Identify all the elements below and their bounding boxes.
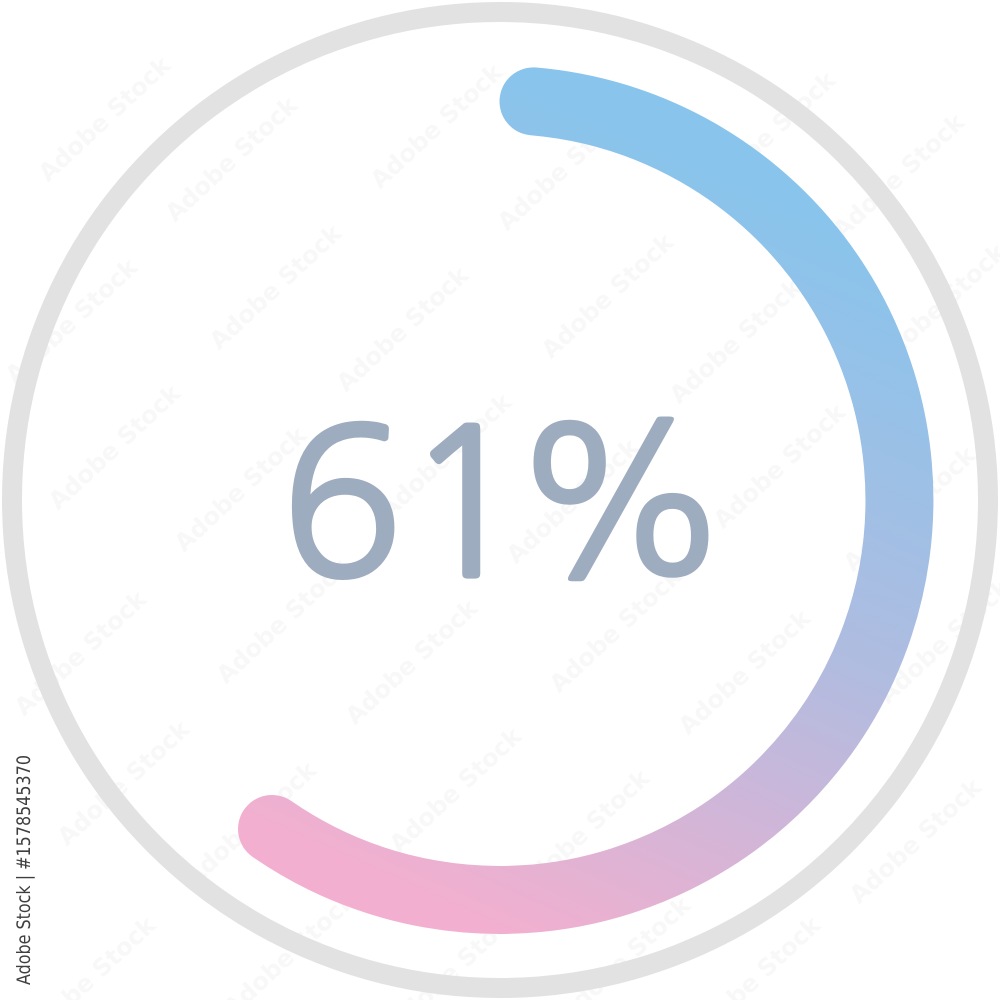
watermark pattern: Adobe Stock [844, 772, 988, 909]
watermark pattern: Adobe Stock [827, 107, 971, 244]
watermark pattern: Adobe Stock [160, 90, 304, 227]
watermark pattern: Adobe Stock [492, 99, 636, 236]
watermark pattern: Adobe Stock [708, 397, 852, 534]
watermark pattern: Adobe Stock [673, 603, 817, 740]
watermark pattern: Adobe Stock [365, 57, 509, 194]
watermark pattern: Adobe Stock [52, 714, 196, 851]
watermark pattern: Adobe Stock [374, 387, 518, 524]
percentage label: % [510, 402, 732, 606]
watermark pattern: Adobe Stock [544, 561, 688, 698]
percentage label: 6 [280, 402, 404, 606]
watermark pattern: Adobe Stock [698, 65, 842, 202]
watermark pattern: Adobe Stock [716, 730, 860, 867]
percentage label [280, 402, 732, 606]
watermark pattern: Adobe Stock [512, 763, 656, 900]
watermark pattern: Adobe Stock [331, 260, 475, 397]
watermark pattern: Adobe Stock [169, 420, 313, 557]
watermark pattern: Adobe Stock [43, 378, 187, 515]
watermark pattern: Adobe Stock [33, 50, 177, 187]
watermark pattern: Adobe Stock [9, 584, 153, 721]
watermark pattern: Adobe Stock [179, 755, 323, 892]
progress arc: 61% [272, 101, 899, 900]
watermark pattern: Adobe Stock [384, 721, 528, 858]
watermark pattern: Adobe Stock [536, 227, 680, 364]
watermark pattern: Adobe Stock [501, 432, 645, 569]
watermark pattern: Adobe Stock [204, 218, 348, 355]
watermark pattern: Adobe Stock [0, 252, 144, 389]
watermark pattern: Adobe Stock [211, 552, 355, 689]
watermark pattern: Adobe Stock [838, 440, 982, 577]
stock id label: Adobe Stock | #1578545370 [13, 755, 35, 985]
percentage label: 1 [403, 402, 527, 606]
watermark pattern: Adobe Stock [664, 272, 808, 409]
watermark pattern: Adobe Stock [340, 593, 484, 730]
